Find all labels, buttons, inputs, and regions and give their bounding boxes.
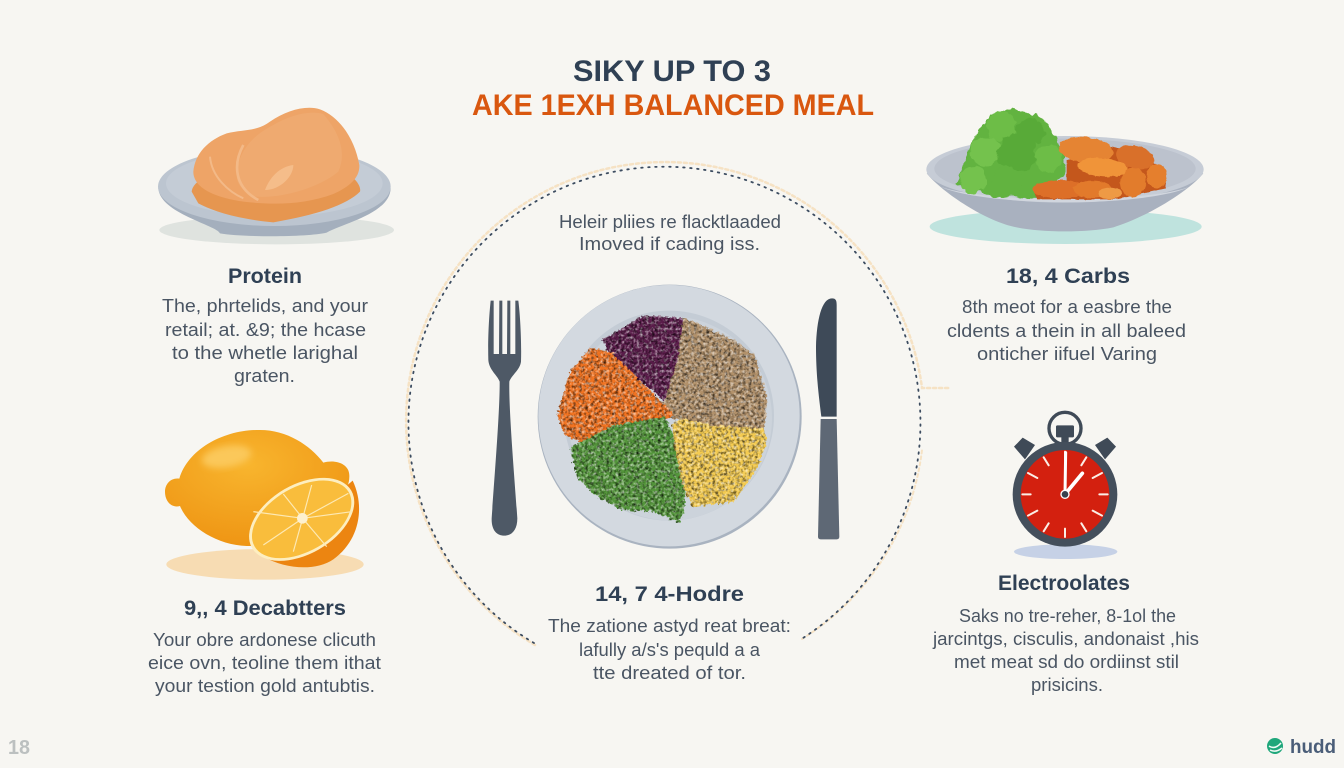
icon: orange lemon bbox=[165, 430, 369, 580]
text: carbs description: onticher iifuel Varing bbox=[977, 344, 1157, 364]
text: hodre description bbox=[548, 616, 791, 683]
panel: protein bbox=[158, 108, 394, 386]
center intro text: Heleir pliies re flacktlaaded bbox=[559, 212, 781, 232]
panel: hodre bbox=[548, 583, 791, 683]
text: protein description: retail; at. &9; the hcase bbox=[165, 320, 366, 340]
dotted ring around the plate bbox=[406, 162, 950, 645]
title bbox=[472, 55, 874, 122]
food: green leaves bbox=[957, 108, 1065, 198]
icon: stopwatch bbox=[1013, 412, 1117, 559]
text: decabtters description: your testion gold antubtis. bbox=[155, 676, 375, 696]
text: protein description: to the whetle larighal bbox=[172, 343, 358, 363]
food: carrots bbox=[557, 347, 674, 443]
center intro text bbox=[559, 212, 781, 254]
icon: bowl with greens and sweet potato bbox=[926, 108, 1204, 244]
page number: 18 bbox=[8, 737, 30, 759]
panel: carbs bbox=[926, 108, 1204, 364]
title: AKE 1EXH BALANCED MEAL bbox=[472, 89, 874, 122]
heading: carbs: 18, 4 Carbs bbox=[1006, 265, 1130, 288]
title: SIKY UP TO 3 bbox=[573, 55, 771, 88]
text: decabtters description: eice ovn, teoline them ithat bbox=[148, 653, 381, 673]
central plate with food bbox=[538, 285, 802, 549]
icon: knife bbox=[816, 298, 839, 539]
text: hodre description: The zatione astyd reat breat: bbox=[548, 616, 791, 636]
center intro text: Imoved if cading iss. bbox=[579, 234, 760, 254]
text: carbs description: 8th meot for a easbre the bbox=[962, 297, 1172, 317]
text: carbs description: cldents a thein in all baleed bbox=[947, 321, 1186, 341]
text: decabtters description: Your obre ardonese clicuth bbox=[153, 630, 376, 650]
text: decabtters description bbox=[148, 630, 381, 696]
heading: hodre: 14, 7 4-Hodre bbox=[595, 583, 744, 606]
text: carbs description bbox=[947, 297, 1186, 364]
food: grains bbox=[663, 317, 767, 430]
panel: decabtters bbox=[148, 430, 381, 696]
text: electrolytes description bbox=[932, 606, 1199, 695]
text: hodre description: tte dreated of tor. bbox=[593, 663, 746, 683]
icon: chicken on plate bbox=[158, 108, 394, 244]
icon: fork bbox=[488, 301, 521, 536]
text: protein description bbox=[162, 296, 368, 386]
logo: hudd: hudd bbox=[1290, 737, 1336, 758]
food: greens bbox=[570, 417, 685, 523]
text: hodre description: lafully a/s's pequld a a bbox=[579, 640, 761, 660]
food: egg bbox=[672, 419, 767, 507]
food: beetroot bbox=[603, 315, 687, 403]
text: electrolytes description: jarcintgs, cisculis, andonaist ,his bbox=[932, 629, 1199, 649]
text: electrolytes description: prisicins. bbox=[1031, 675, 1103, 695]
heading: electrolytes: Electroolates bbox=[998, 572, 1130, 595]
panel: electrolytes bbox=[932, 412, 1199, 695]
text: electrolytes description: met meat sd do ordiinst stil bbox=[954, 652, 1179, 672]
heading: decabtters: 9,, 4 Decabtters bbox=[184, 597, 346, 620]
food: sweet potato pieces bbox=[1033, 135, 1167, 200]
text: protein description: The, phrtelids, and your bbox=[162, 296, 368, 316]
heading: protein: Protein bbox=[228, 265, 302, 288]
text: protein description: graten. bbox=[234, 366, 295, 386]
text: electrolytes description: Saks no tre-reher, 8-1ol the bbox=[959, 606, 1176, 626]
logo: hudd bbox=[1267, 737, 1336, 758]
